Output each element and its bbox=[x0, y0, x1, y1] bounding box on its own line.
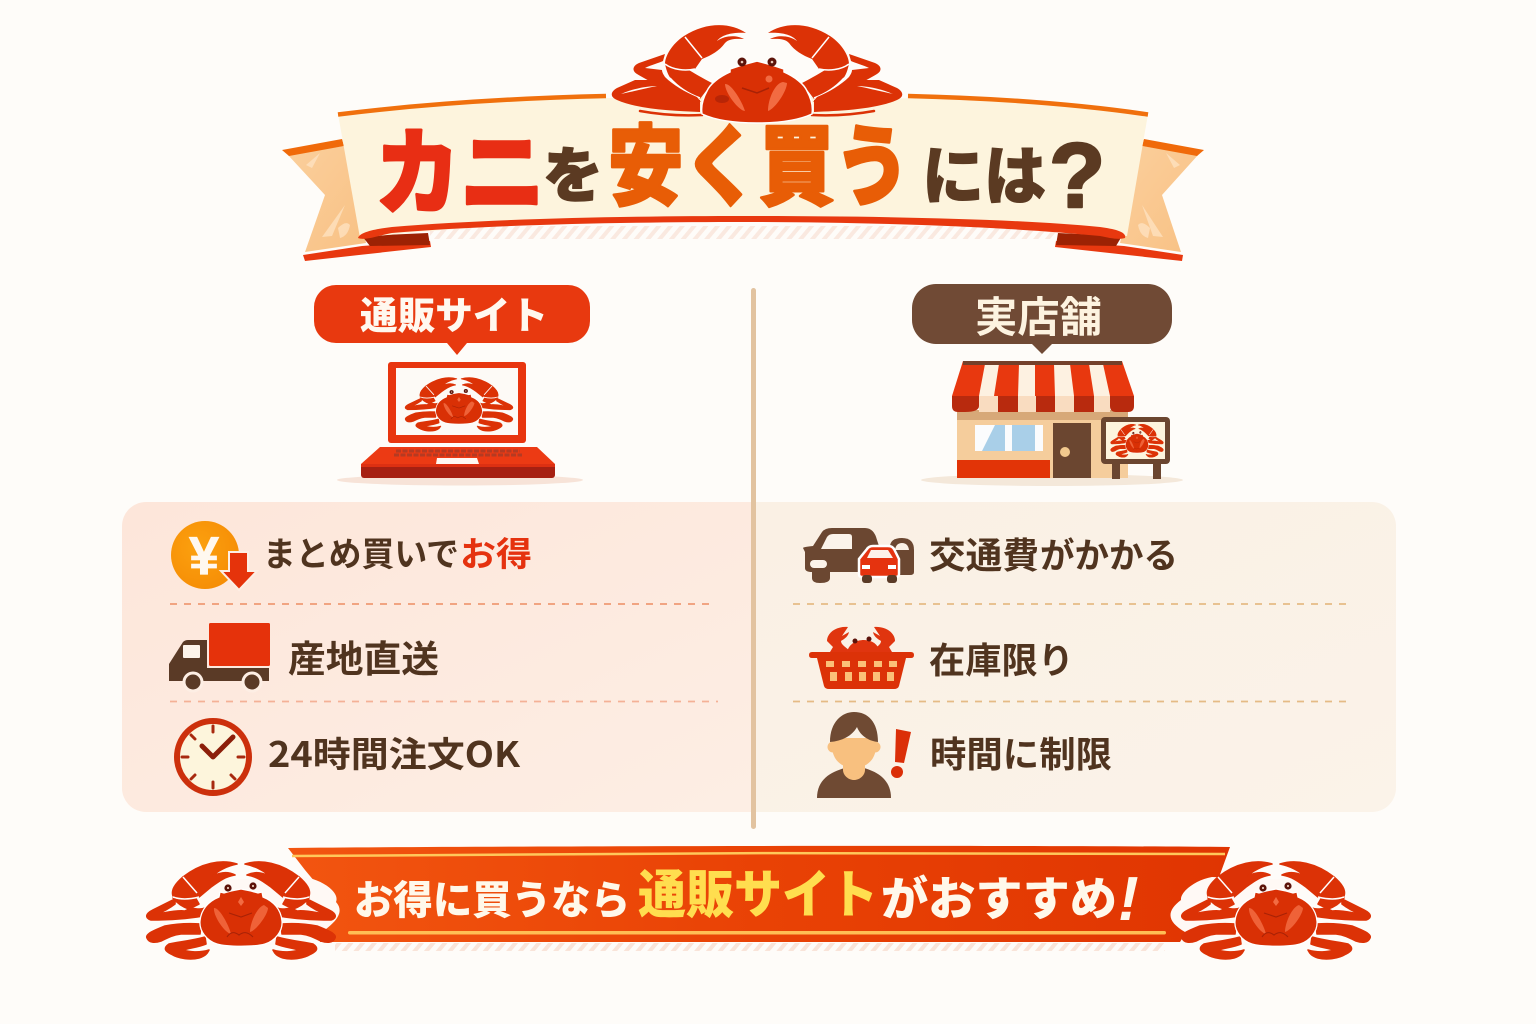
label: mail order: 通販サイト bbox=[360, 285, 548, 340]
icon: yen coin with down arrow: ¥ bbox=[189, 526, 219, 586]
text: limited hours: 時間に制限 bbox=[930, 726, 1112, 778]
icon: truck bbox=[169, 623, 270, 692]
ribbon hatch shadow bbox=[430, 226, 1060, 239]
divider bbox=[751, 288, 756, 829]
title ribbon bbox=[282, 96, 1204, 261]
title text: には bbox=[922, 126, 1046, 218]
text: 24 hour ordering: 24時間注文OK bbox=[268, 727, 521, 778]
title text: を bbox=[543, 128, 603, 215]
icon: crab basket bbox=[809, 627, 914, 689]
icon: store bbox=[921, 361, 1183, 486]
banner text: 通販サイト bbox=[638, 853, 878, 928]
text: transport costs bbox=[929, 527, 1178, 579]
title crab bbox=[612, 25, 902, 123]
icon: person with exclamation bbox=[817, 712, 911, 798]
text: transport costs: がかかる bbox=[1040, 528, 1178, 579]
text: bulk purchase: お得 bbox=[460, 527, 532, 576]
ribbon body bbox=[338, 96, 1148, 238]
label: physical store bbox=[912, 284, 1172, 354]
icon: cars bbox=[803, 528, 914, 583]
label: physical store: 実店舗 bbox=[975, 284, 1102, 345]
banner text: ! bbox=[1118, 865, 1139, 934]
banner text: がおすすめ bbox=[881, 863, 1117, 929]
banner body bbox=[288, 846, 1230, 942]
text: bulk purchase: まとめ買いで bbox=[263, 527, 459, 576]
banner right crab bbox=[1170, 862, 1370, 959]
icon: laptop bbox=[337, 362, 583, 486]
panel: mail order merits bbox=[122, 502, 752, 812]
label: mail order bbox=[314, 285, 590, 355]
ribbon bottom edge bbox=[358, 216, 1125, 239]
banner shadow hatch bbox=[335, 943, 1165, 951]
text: direct from source: 産地直送 bbox=[288, 629, 439, 683]
ribbon left tail bbox=[282, 139, 431, 261]
ribbon right tail bbox=[1055, 139, 1204, 261]
banner text bbox=[354, 853, 1139, 934]
title text: ? bbox=[1049, 125, 1105, 227]
bottom banner bbox=[147, 846, 1370, 959]
ribbon top edge bbox=[338, 96, 1148, 114]
title text: カニ bbox=[375, 98, 545, 234]
banner left crab bbox=[147, 862, 340, 959]
ribbon fold shadows bbox=[362, 233, 430, 246]
icon: yen coin with down arrow bbox=[171, 521, 257, 590]
text: limited stock: 在庫限り bbox=[929, 632, 1074, 684]
banner text: お得に買うなら bbox=[354, 868, 630, 926]
title text: 安く買う bbox=[608, 97, 910, 224]
icon: clock bbox=[177, 721, 249, 793]
title text bbox=[375, 97, 1105, 234]
panel: store demerits bbox=[756, 502, 1396, 812]
text: transport costs: 交通費 bbox=[929, 527, 1039, 579]
